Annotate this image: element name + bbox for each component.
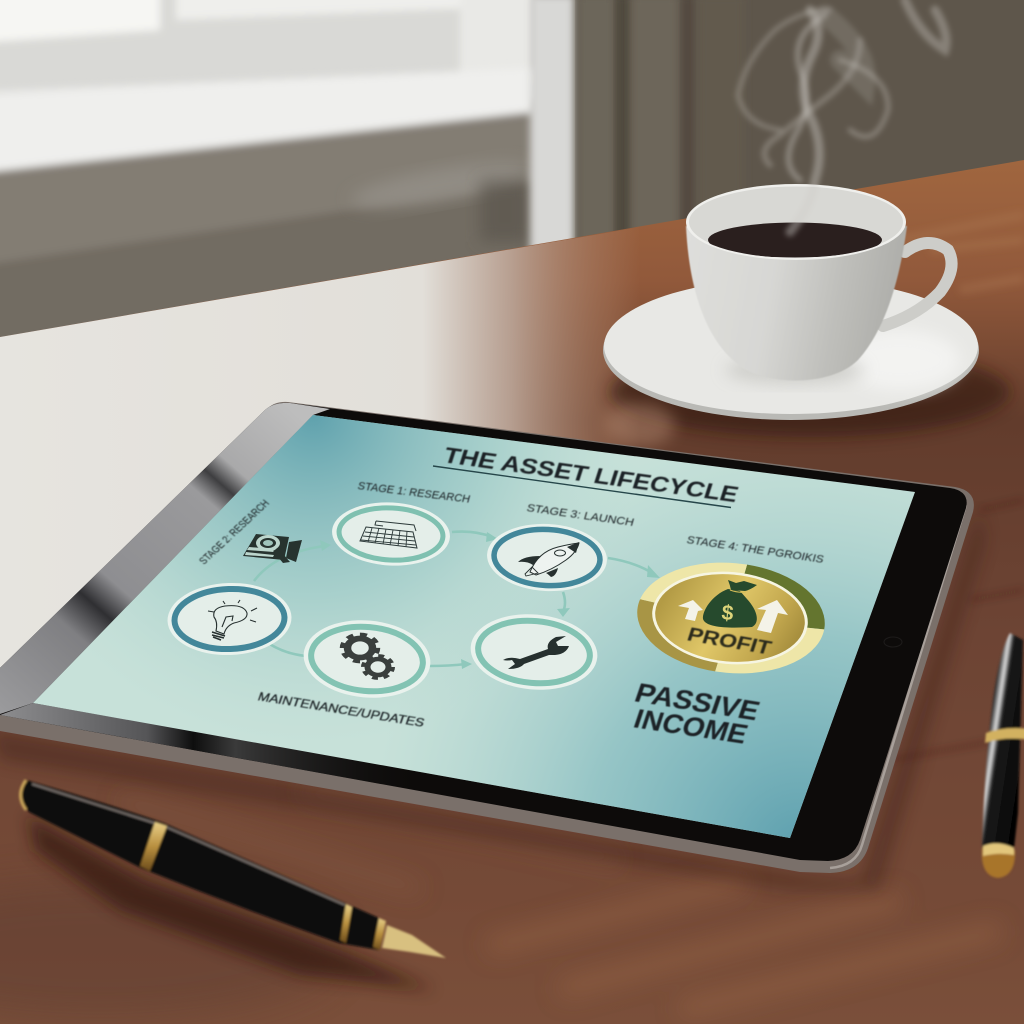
window pane	[0, 0, 535, 100]
icon: money bag: $	[720, 601, 735, 625]
heading: passive income: INCOME	[630, 703, 752, 749]
reflection: saucer on table	[605, 403, 675, 447]
icon: lightbulb	[208, 600, 257, 640]
coffee	[708, 222, 882, 258]
saucer	[603, 278, 979, 420]
profit label: PROFIT	[684, 625, 774, 659]
pen bands	[140, 822, 167, 871]
heading: passive income: PASSIVE	[631, 677, 764, 726]
window sill	[0, 68, 535, 345]
pen: right edge pen	[982, 633, 1024, 878]
label: stage 2: STAGE 2: RESEARCH	[197, 498, 272, 567]
label: stage 1: STAGE 1: RESEARCH	[356, 480, 471, 506]
right pen cap	[982, 845, 1015, 878]
profit ring segments	[637, 562, 825, 674]
label: stage 3: STAGE 3: LAUNCH	[525, 502, 635, 529]
icon: keyboard	[360, 521, 417, 548]
wood grain	[498, 184, 1019, 1011]
lower left bezel reflection	[0, 703, 420, 791]
icon: gears	[342, 634, 393, 678]
icon: wrench	[503, 636, 569, 669]
screen	[33, 415, 915, 838]
connector arrows	[254, 532, 660, 669]
label: stage 4: STAGE 4: THE PGROIKIS	[685, 534, 825, 566]
icon: research magnifier on documents	[243, 534, 302, 563]
heading: passive income	[630, 677, 764, 749]
pen nib	[382, 925, 446, 958]
cup rim	[686, 184, 906, 260]
label: maintenance: MAINTENANCE/UPDATES	[256, 690, 426, 730]
shadow: saucer	[610, 347, 1010, 437]
tablet	[0, 402, 974, 873]
coffee cup and saucer	[603, 184, 979, 420]
node: rocket	[485, 521, 609, 594]
title: THE ASSET LIFECYCLE	[440, 443, 741, 507]
shadow: tablet	[0, 510, 985, 890]
icon: money bag	[703, 580, 757, 628]
window glare on table	[0, 227, 640, 700]
left glossy bezel	[0, 403, 330, 714]
icon: right up arrow	[757, 600, 788, 633]
profit inner disc	[648, 565, 812, 671]
right pen band	[985, 728, 1024, 743]
tablet metal edge	[0, 402, 974, 873]
cup body	[686, 226, 907, 380]
background: window and wall	[0, 0, 1024, 345]
black bezel	[0, 403, 967, 861]
icon: rocket	[518, 542, 579, 577]
node: profit badge	[637, 562, 825, 674]
curtain	[575, 0, 1024, 345]
shadow: pen	[28, 815, 435, 990]
node: gears	[300, 615, 434, 703]
pen: foreground fountain pen	[20, 780, 446, 958]
cup handle	[883, 243, 952, 326]
node: keyboard	[330, 499, 452, 569]
home button hint	[884, 637, 902, 647]
node: wrench	[467, 609, 601, 695]
steam	[738, 0, 946, 232]
node: lightbulb	[166, 581, 293, 657]
icon: left up arrow	[678, 600, 703, 621]
